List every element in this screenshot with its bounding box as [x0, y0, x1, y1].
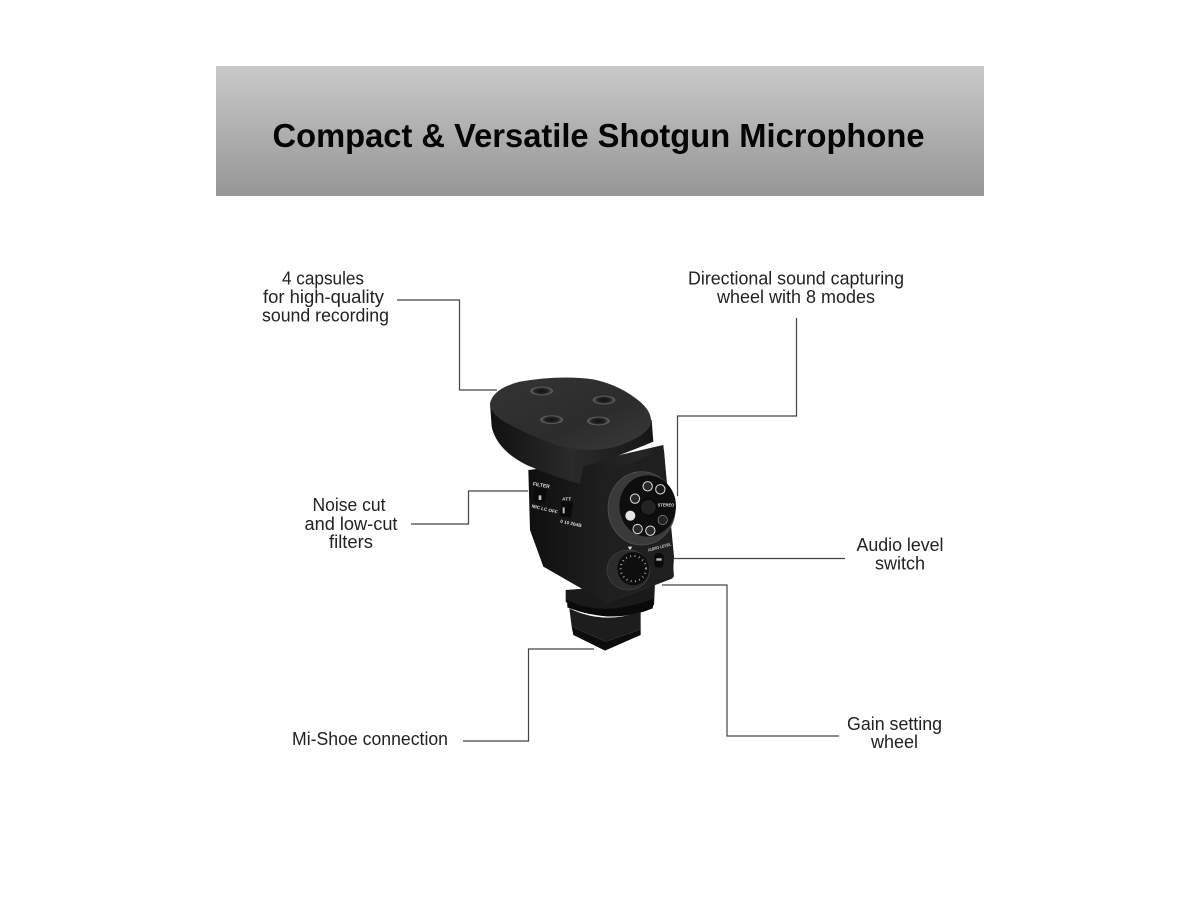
- title: Compact & Versatile Shotgun Microphone: [272, 117, 924, 154]
- callout: audio level switch: switch: [875, 554, 925, 574]
- callout: 4 capsules: sound recording: [262, 306, 389, 326]
- filter switch: [531, 481, 558, 515]
- attenuator switch: ATT: [562, 497, 571, 503]
- top plate housing: [490, 403, 653, 484]
- filter switch: FILTER: [532, 481, 551, 490]
- callout: filters: [304, 491, 528, 552]
- directional wheel: STEREO: [658, 502, 675, 507]
- attenuator switch: 0 10 20dB: [560, 519, 583, 528]
- callout: filters: Noise cut: [312, 495, 386, 515]
- callout: directional wheel: wheel with 8 modes: [716, 287, 875, 307]
- callout: Mi-Shoe: Mi-Shoe connection: [292, 729, 448, 749]
- directional wheel: [608, 472, 676, 545]
- audio level switch: [647, 542, 672, 568]
- callout: directional wheel: Directional sound capturing: [688, 268, 904, 288]
- main body: [528, 445, 674, 603]
- callout: gain wheel: [662, 585, 942, 752]
- callout: audio level switch: [674, 535, 944, 574]
- callout: gain wheel: wheel: [870, 732, 918, 752]
- callout: audio level switch: Audio level: [856, 535, 944, 555]
- shoe mount collar: [566, 583, 655, 651]
- title banner: [216, 66, 984, 196]
- callout: directional wheel: [678, 268, 904, 496]
- callout: 4 capsules: 4 capsules: [282, 268, 364, 288]
- callout: filters: filters: [329, 532, 373, 552]
- attenuator switch: [559, 497, 583, 528]
- callout: 4 capsules: for high-quality: [263, 287, 384, 307]
- callout: gain wheel: Gain setting: [847, 714, 942, 734]
- callout: Mi-Shoe: [292, 649, 594, 749]
- callout: filters: and low-cut: [304, 514, 398, 534]
- microphone product illustration: [490, 377, 676, 651]
- callout: 4 capsules: [262, 268, 497, 390]
- top plate with capsule holes: [490, 377, 651, 450]
- audio level switch: AUDIO LEVEL: [647, 542, 672, 553]
- filter switch: MIC LC OFF: [531, 503, 558, 515]
- gain wheel: [607, 547, 650, 590]
- front face: [598, 450, 674, 602]
